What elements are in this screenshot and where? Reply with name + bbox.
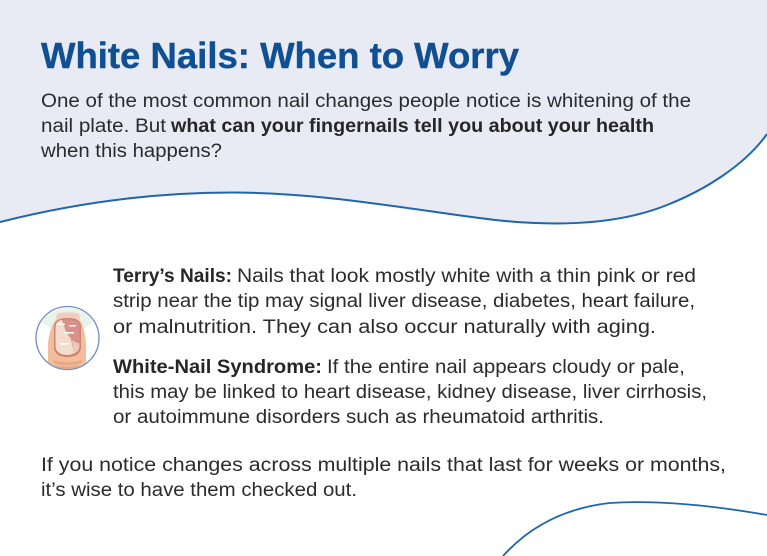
text block: Terry's Nails [113,266,696,338]
text block: White-Nail Syndrome: If the entire nail appears cloudy or pale, [327,357,685,378]
intro text [40,91,691,162]
text block: Terry's Nails: Terry’s Nails: [113,266,232,287]
text block: White-Nail Syndrome [113,357,707,428]
text block: White-Nail Syndrome: White-Nail Syndrome: [113,357,322,378]
decorative bottom curve [503,502,767,556]
text block: Terry's Nails: strip near the tip may signal liver disease, diabetes, heart failure, [113,291,695,312]
intro text: nail plate. But [41,116,167,137]
header background panel [0,0,767,223]
intro text: when this happens? [40,141,222,162]
text block: Terry's Nails: Nails that look mostly white with a thin pink or red [237,266,696,287]
closing text [41,455,726,501]
intro text: what can your fingernails tell you about your health [170,116,654,137]
icon: fingernail with white patches [36,306,99,372]
closing text: If you notice changes across multiple nails that last for weeks or months, [41,455,726,476]
text block: White-Nail Syndrome: or autoimmune disorders such as rheumatoid arthritis. [113,407,604,428]
closing text: it’s wise to have them checked out. [41,480,357,501]
intro text: One of the most common nail changes people notice is whitening of the [41,91,691,112]
text block: Terry's Nails: or malnutrition. They can also occur naturally with aging. [113,317,656,338]
title: White Nails: When to Worry [41,35,519,76]
text block: White-Nail Syndrome: this may be linked to heart disease, kidney disease, liver cirrhosis, [113,382,707,403]
